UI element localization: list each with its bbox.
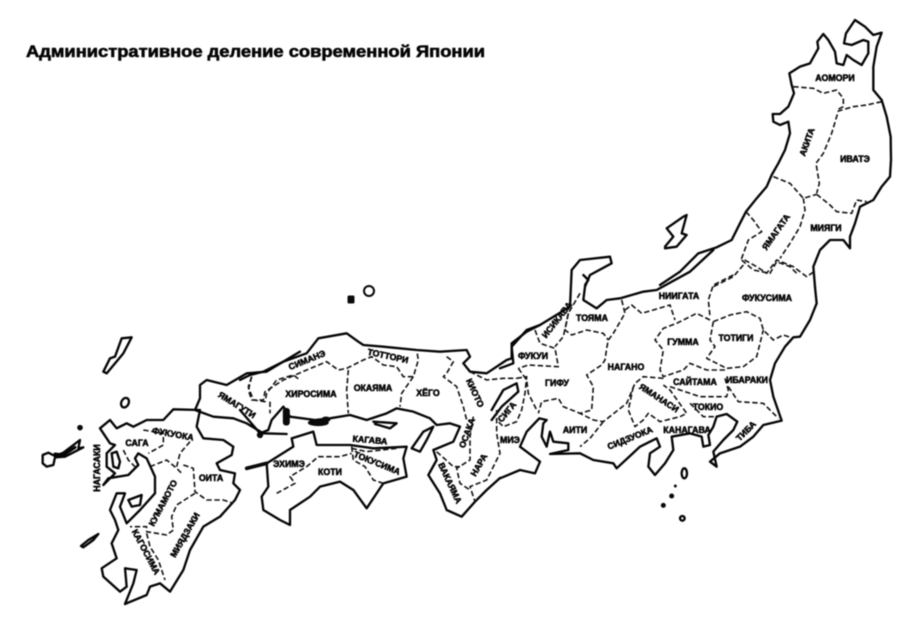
label: Kagawa: КАГАВА: [352, 434, 388, 447]
label: Iwate: ИВАТЭ: [840, 154, 870, 164]
label: Gifu: ГИФУ: [545, 378, 569, 388]
label: Nara: НАРА: [469, 451, 490, 478]
label: Miyazaki: МИЯДЗАКИ: [168, 511, 202, 559]
label: Miyagi: МИЯГИ: [810, 223, 842, 233]
islands: Koshiki: [81, 534, 98, 547]
label: Shimane: СИМАНЭ: [287, 348, 327, 372]
label: Hyogo: ХЁГО: [416, 388, 440, 398]
label: Akita: АКИТА: [797, 126, 817, 157]
label: Chiba: ТИБА: [734, 419, 758, 443]
map: Kyushu and Yamaguchi outline and borders: [43, 337, 300, 604]
label: Saga: САГА: [125, 438, 149, 448]
label: Tokyo: ТОКИО: [693, 402, 723, 412]
label: Niigata: НИИГАТА: [659, 291, 700, 301]
island: Sado: [665, 215, 687, 248]
label: Aomori: АОМОРИ: [815, 73, 855, 83]
labels: Kinki, Chugoku, Shikoku: [273, 347, 519, 506]
title: Административное деление современной Японии: [26, 43, 485, 61]
label: Kanagawa: КАНАГАВА: [663, 425, 711, 435]
label: Wakayama: ВАКАЯМА: [436, 461, 464, 506]
label: Hiroshima: ХИРОСИМА: [285, 389, 337, 399]
map: Kinki, Chugoku and Shikoku region outline and borders: [240, 325, 540, 525]
label: Saitama: САЙТАМА: [673, 376, 717, 387]
label: Kyoto: КИОТО: [464, 377, 486, 409]
label: Yamagata: ЯМАГАТА: [760, 212, 792, 252]
label: Ehime: ЭХИМЭ: [273, 459, 305, 469]
label: Toyama: ТОЯМА: [576, 313, 609, 323]
island: Shikoku: [247, 432, 407, 525]
island: Iki: [120, 397, 130, 409]
label: Osaka: ОСАКА: [457, 416, 477, 449]
label: Kochi: КОТИ: [318, 467, 342, 477]
label: Mie: МИЭ: [500, 435, 520, 445]
label: Nagasaki: НАГАСАКИ: [92, 444, 102, 492]
islands: Inland Sea: [257, 408, 397, 438]
islands: Izu: [661, 468, 687, 521]
map: Chubu and Kanto region outline and borders: [500, 250, 817, 521]
island: Tsushima: [103, 337, 132, 373]
Lake Biwa: [492, 383, 518, 420]
label: Fukuoka: ФУКУОКА: [151, 425, 195, 443]
label: Shiga: СИГА: [496, 399, 519, 424]
map: Tohoku region outline and borders: [660, 20, 891, 287]
label: Yamanashi: ЯМАНАСИ: [637, 382, 681, 414]
label: Aichi: АИТИ: [563, 425, 587, 435]
label: Shizuoka: СИДЗУОКА: [606, 424, 655, 452]
islands: Goto: [43, 440, 83, 467]
label: Tokushima: ТОКУСИМА: [352, 449, 402, 477]
label: Ibaraki: ИБАРАКИ: [726, 375, 768, 385]
label: Fukushima: ФУКУСИМА: [742, 293, 793, 303]
labels: Kyushu: [92, 390, 258, 577]
label: Nagano: НАГАНО: [608, 362, 645, 372]
island: Awaji: [412, 427, 433, 452]
label: Kumamoto: КУМАМОТО: [147, 478, 179, 528]
labels: Tohoku: [659, 73, 870, 303]
label: Kagoshima: КАГОСИМА: [130, 528, 162, 577]
label: Oita: ОИТА: [199, 473, 224, 483]
label: Ishikawa: ИСИКАВА: [540, 299, 575, 340]
islands: Oki: [349, 286, 374, 302]
Noto peninsula mark: [583, 275, 588, 285]
label: Gunma: ГУММА: [667, 337, 699, 347]
label: Tottori: ТОТТОРИ: [367, 347, 409, 365]
label: Fukui: ФУКУИ: [518, 351, 548, 361]
label: Tochigi: ТОТИГИ: [718, 333, 754, 343]
labels: Chubu and Kanto: [500, 299, 768, 452]
label: Okayama: ОКАЯМА: [354, 383, 393, 393]
label: Yamaguchi: ЯМАГУТИ: [216, 390, 258, 420]
